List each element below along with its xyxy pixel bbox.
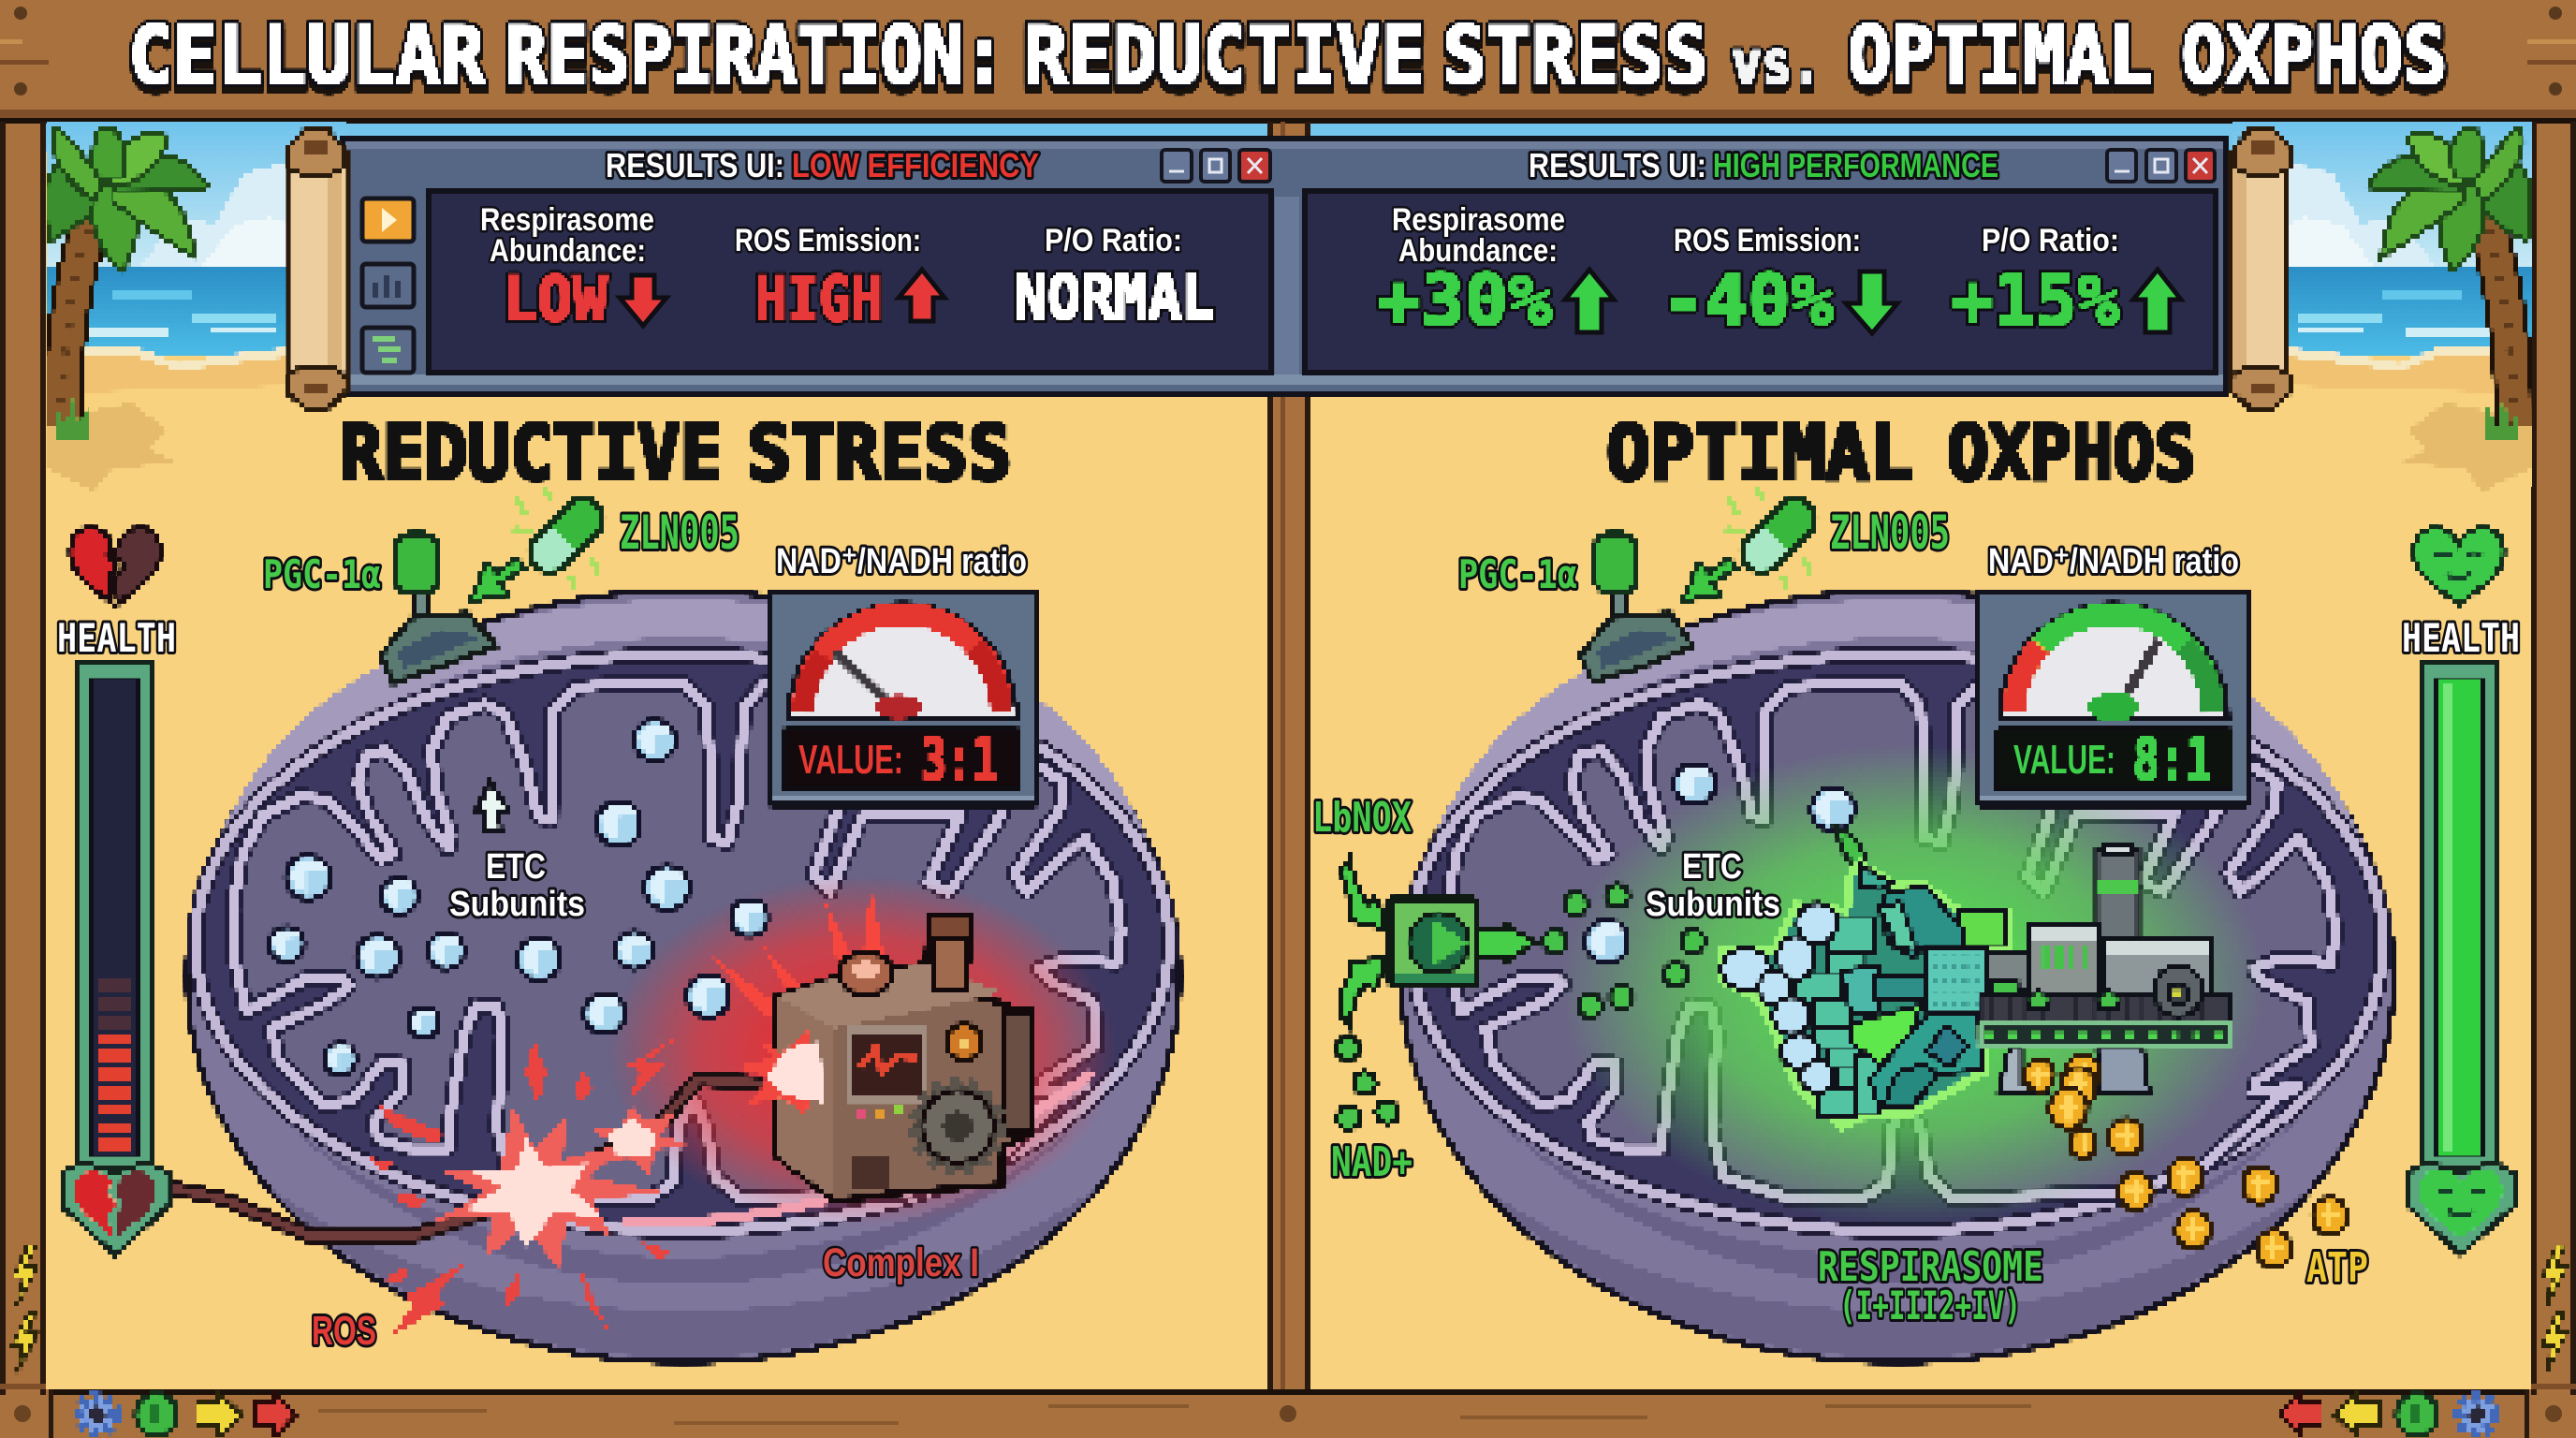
heading: reductive stress: REDUCTIVE (340, 410, 723, 498)
window buttons right (2107, 150, 2215, 182)
icon: happy heart (2414, 528, 2504, 604)
bottom toolbar icons left (80, 1393, 296, 1436)
label: ETC subunits right: Subunits (1646, 885, 1780, 924)
icon: LbNOX device (1337, 858, 1535, 1129)
metric: P/O normal: NORMAL (1014, 261, 1215, 333)
window title left (606, 146, 1039, 184)
window title left: LOW EFFICIENCY (792, 146, 1039, 184)
bottom toolbar icons right (2280, 1393, 2495, 1436)
lever and drug left (263, 487, 1027, 683)
icon: PGC-1a lever left (381, 534, 496, 683)
metric: respirasome low: LOW (503, 263, 607, 335)
red glow (607, 875, 1118, 1225)
health bar full (2422, 663, 2497, 1168)
label: NAD+: NAD+ (1331, 1138, 1412, 1186)
label: PGC-1a left: PGC-1α (263, 551, 381, 597)
ROS explosion (370, 1037, 690, 1335)
metric: P/O +15%: P/O Ratio: (1982, 223, 2119, 258)
panel: low efficiency results (429, 191, 1271, 373)
panel: high performance results (1305, 191, 2216, 373)
label: health right: HEALTH (2402, 615, 2520, 661)
heading: optimal oxphos: OPTIMAL (1606, 410, 1913, 498)
metric: ROS high: HIGH (755, 263, 883, 335)
icon: broken heart (70, 528, 160, 604)
health meter right (2402, 528, 2520, 1255)
health bar low (79, 663, 154, 1168)
metric: P/O +15% (1952, 223, 2181, 342)
label: Complex I: Complex I (823, 1240, 979, 1285)
mitochondrion right (1401, 591, 2393, 1362)
metric: P/O normal (1014, 223, 1215, 333)
label: respirasome: RESPIRASOME (1818, 1243, 2043, 1291)
respirasome machine (1720, 845, 2231, 1126)
window title right: RESULTS UI: (1529, 146, 1706, 184)
window title right (1529, 146, 1998, 184)
metric: P/O normal: P/O Ratio: (1045, 223, 1182, 258)
metric: ROS high: ROS Emission: (735, 223, 921, 258)
window title right: HIGH PERFORMANCE (1713, 146, 1998, 184)
label: ROS: ROS (312, 1308, 376, 1354)
icon: gauge right (1978, 592, 2248, 805)
side button: play (362, 198, 414, 242)
metric: respirasome +30% (1377, 202, 1614, 342)
ATP coins (2025, 1055, 2347, 1268)
lightning icons (13, 1245, 2567, 1373)
metric: respirasome low: Abundance: (490, 233, 646, 269)
metric: ROS -40%: ROS Emission: (1674, 223, 1861, 258)
green glow (1559, 744, 2265, 1225)
panel: reductive stress mitochondrion (168, 591, 1179, 1362)
title: RESPIRATION: (505, 9, 1005, 103)
heading: optimal oxphos: OXPHOS (1947, 410, 2196, 498)
heading: reductive stress (340, 410, 1012, 498)
label: ETC subunits right (1646, 847, 1780, 924)
label: health left: HEALTH (57, 615, 176, 661)
lever and drug right (1458, 487, 2239, 682)
gauge value left: VALUE: (798, 737, 903, 783)
window buttons left (1162, 150, 1270, 182)
icon: ZLN005 capsule left (471, 487, 610, 601)
label: ZLN005 right: ZLN005 (1830, 506, 1950, 560)
mitochondrion left (187, 591, 1179, 1362)
label: respirasome (1818, 1243, 2043, 1328)
icon: broken heart shield (62, 1162, 168, 1255)
metric: respirasome low: Respirasome (480, 202, 654, 238)
label: ZLN005 left: ZLN005 (620, 506, 739, 560)
gauge value right: VALUE: (2013, 737, 2115, 783)
gauge value left (798, 726, 998, 794)
wire to broken heart (168, 1079, 764, 1237)
title: STRESS (1442, 9, 1708, 103)
gauge value left: 3:1 (921, 726, 998, 794)
icon: ZLN005 capsule right (1683, 487, 1822, 601)
label: LbNOX: LbNOX (1312, 794, 1412, 842)
ETC crystals and NAD dots right (1544, 764, 1867, 1018)
label: ETC subunits right: ETC (1682, 847, 1742, 887)
icon: right palm beach (2232, 122, 2531, 492)
metric: respirasome +30%: +30% (1377, 258, 1552, 342)
side button: list (362, 328, 414, 373)
title (128, 9, 2448, 103)
label: respirasome: (I+III2+IV) (1839, 1283, 2021, 1328)
metric: P/O +15%: +15% (1952, 258, 2119, 342)
metric: ROS high (735, 223, 944, 335)
window title left: RESULTS UI: (606, 146, 784, 184)
label: PGC-1a right: PGC-1α (1458, 551, 1577, 597)
icon: right scroll (2232, 129, 2291, 408)
metric: respirasome +30%: Respirasome (1392, 202, 1565, 238)
health meter left (57, 528, 176, 1255)
label: NAD ratio right: NAD⁺/NADH ratio (1988, 542, 2239, 581)
metric: respirasome +30%: Abundance: (1398, 233, 1558, 269)
title: OPTIMAL (1848, 9, 2152, 103)
icon: gauge left (769, 592, 1037, 805)
results window (343, 139, 2226, 394)
panel: optimal oxphos mitochondrion (1312, 591, 2393, 1362)
label: ETC subunits left: Subunits (449, 885, 585, 924)
gauge value right: 8:1 (2133, 726, 2212, 794)
title: CELLULAR (128, 9, 485, 103)
label: NAD ratio left: NAD⁺/NADH ratio (776, 542, 1027, 581)
ETC subunit crystals left (270, 720, 768, 1075)
icon: broken complex I machine (735, 915, 1032, 1201)
icon: left palm beach (45, 122, 344, 492)
metric: ROS -40%: -40% (1661, 258, 1834, 342)
icon: left scroll (286, 129, 346, 408)
icon: happy heart shield (2408, 1162, 2514, 1255)
side button: chart (362, 264, 414, 307)
heading: reductive stress: STRESS (747, 410, 1012, 498)
title: REDUCTIVE (1023, 9, 1426, 103)
title: vs. (1732, 29, 1822, 98)
label: ETC subunits left: ETC (486, 847, 546, 887)
heading: optimal oxphos (1606, 410, 2196, 498)
title: OXPHOS (2181, 9, 2448, 103)
icon: PGC-1a lever right (1580, 534, 1692, 682)
metric: ROS -40% (1661, 223, 1897, 342)
metric: respirasome low (480, 202, 666, 335)
label: ETC subunits left (449, 847, 585, 924)
label: ATP: ATP (2306, 1244, 2368, 1292)
gauge value right (2013, 726, 2212, 794)
